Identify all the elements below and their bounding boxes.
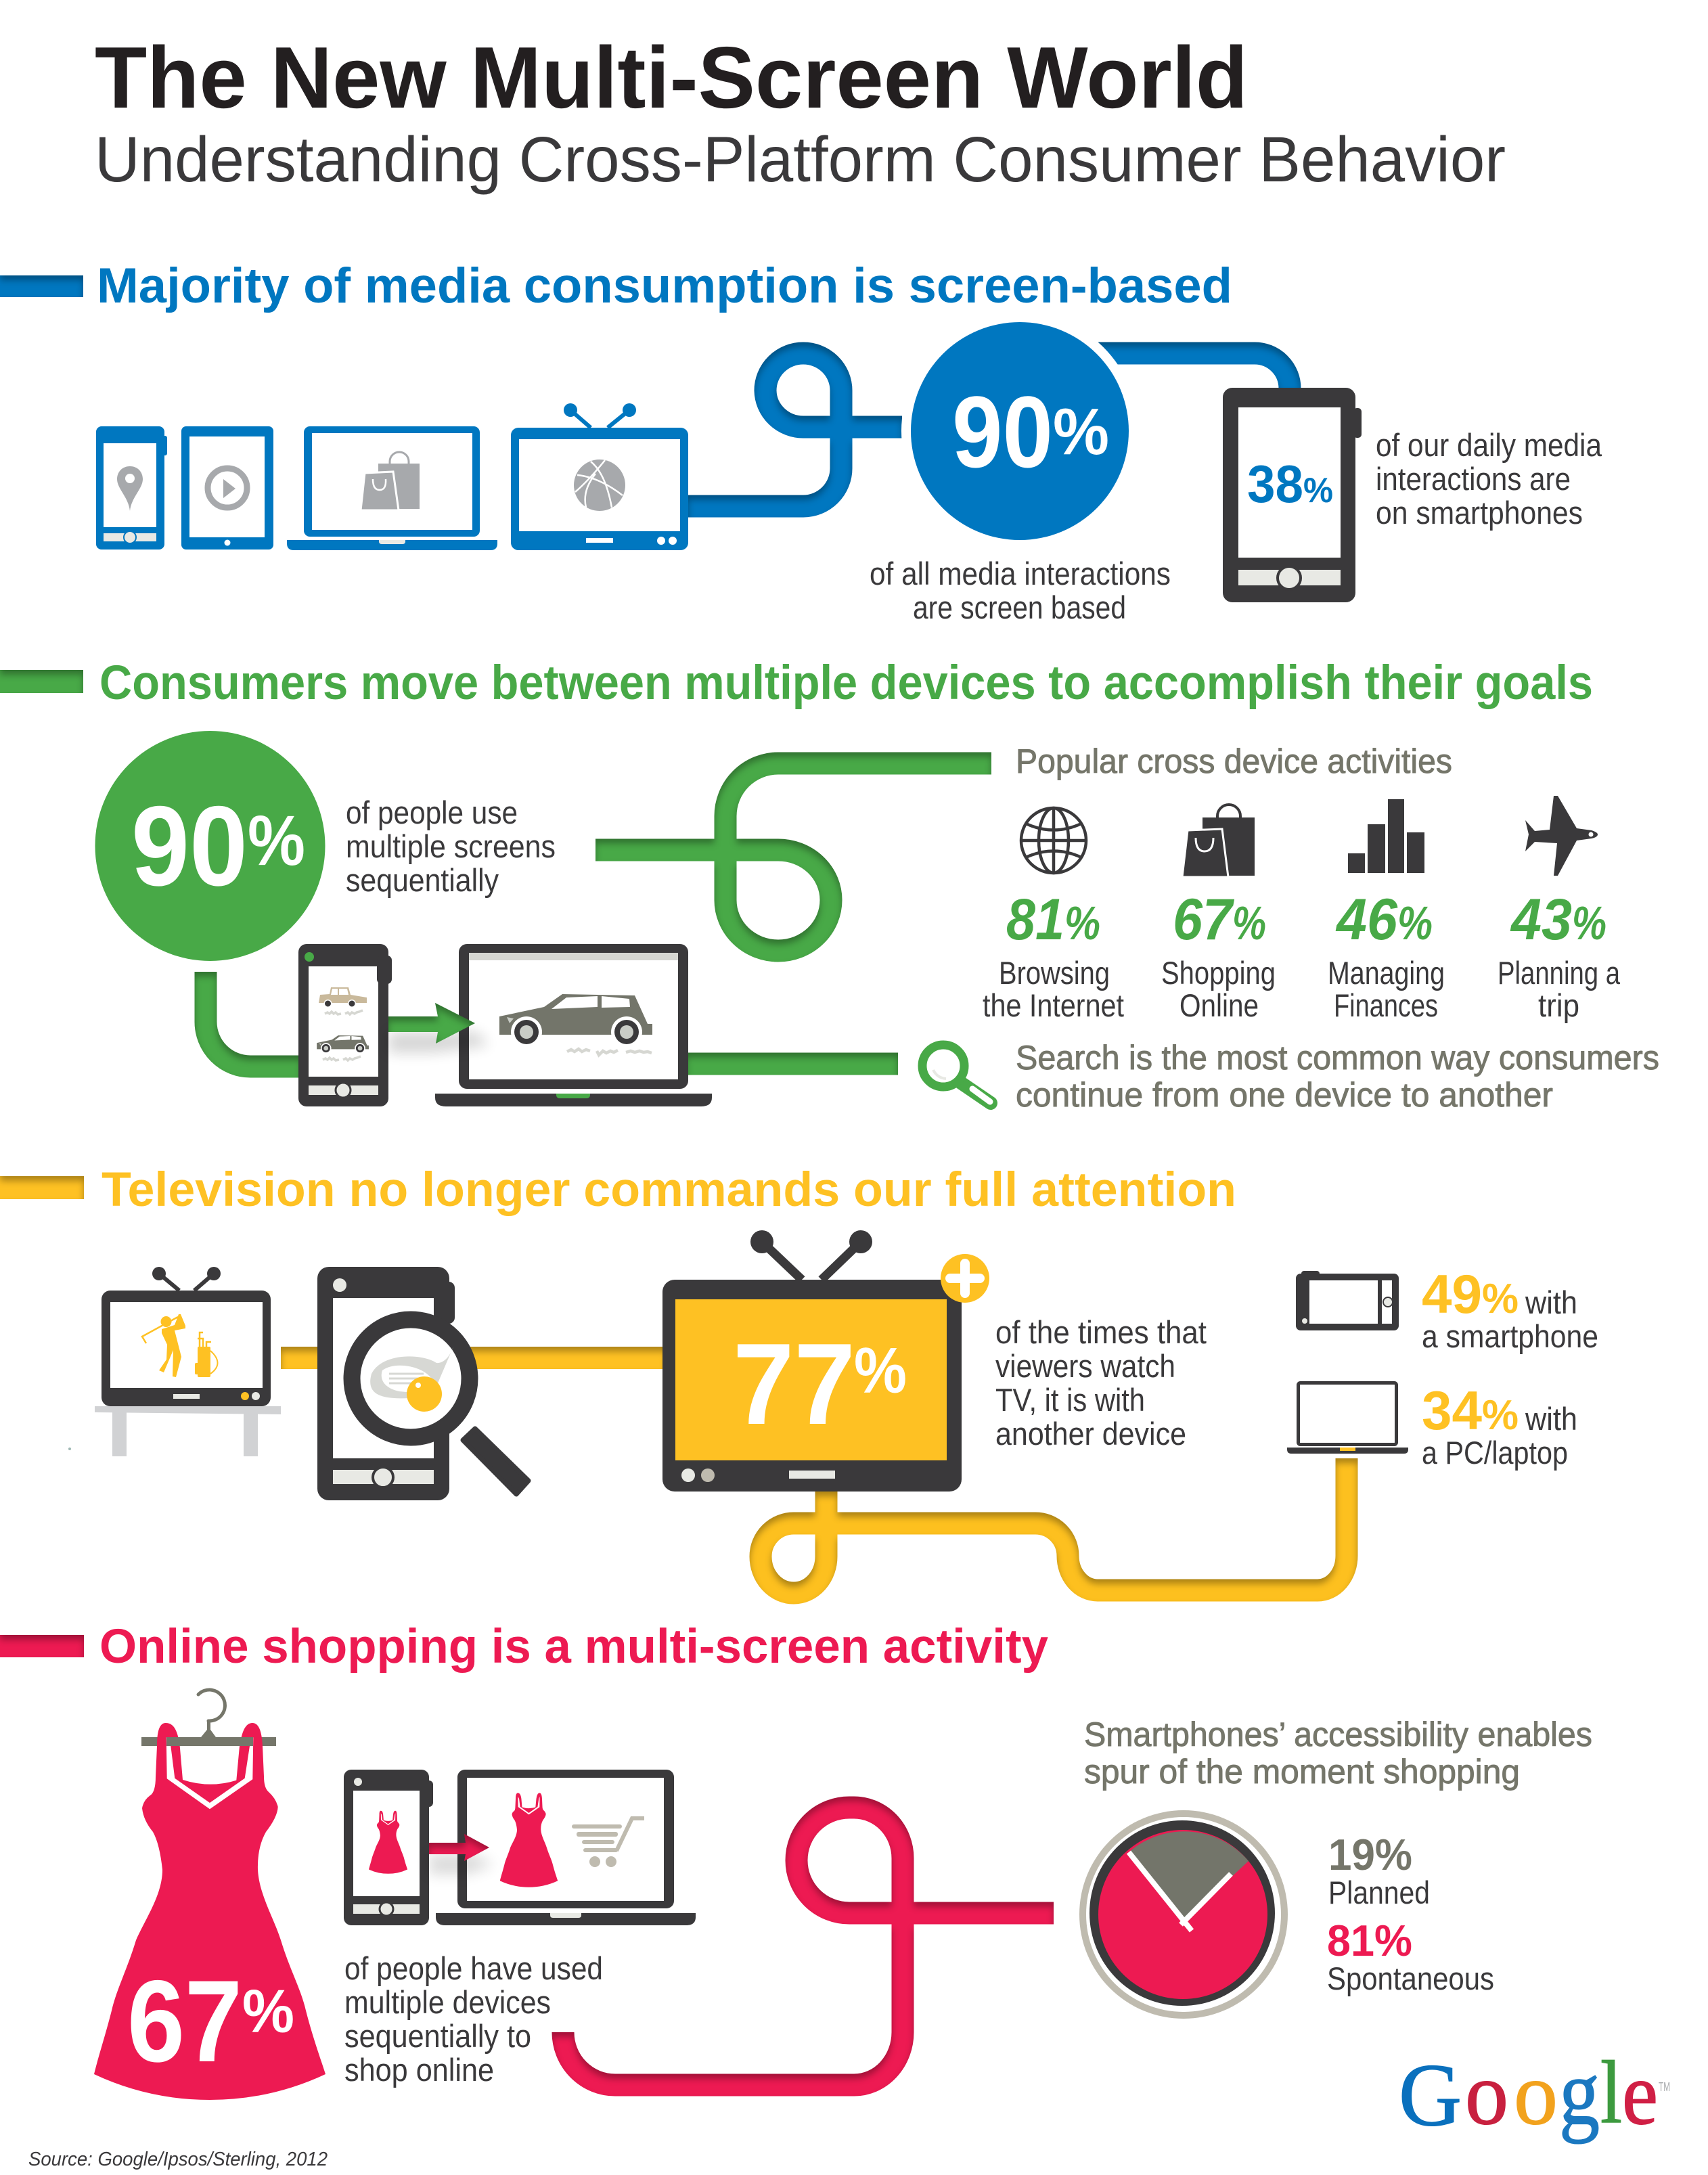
callout: search text: Search is the most common way consumers	[1016, 1039, 1659, 1077]
icon: laptop with shopping bags	[287, 426, 497, 550]
stat: finances 46 percent: Managing	[1328, 955, 1445, 991]
cable: yellow connecting TVs	[281, 1347, 667, 1369]
icon: phone with magnifier and golf club	[317, 1267, 529, 1500]
source note: Source: Google/Ipsos/Sterling, 2012	[28, 2149, 328, 2170]
stat circle: 90 percent	[901, 313, 1138, 550]
caption: sequential screens	[346, 794, 556, 898]
caption: 38 percent: on smartphones	[1376, 495, 1583, 531]
caption: 77 percent	[995, 1314, 1207, 1452]
stat: shopping 67 percent: 67	[1173, 887, 1235, 952]
stat: finances 46 percent: %	[1397, 897, 1433, 949]
stat: 19 percent planned: 19%	[1328, 1830, 1412, 1879]
cable: circle to phone	[206, 972, 301, 1067]
caption: 67 percent: of people have used	[344, 1950, 603, 1986]
stat: browsing 81 percent: %	[1064, 897, 1100, 949]
logo: Google: TM	[1659, 2080, 1670, 2094]
logo: Google: o	[1465, 2044, 1508, 2143]
stat circle: 90 percent: 90	[131, 782, 248, 910]
stat circle: 90 percent: %	[1053, 395, 1109, 468]
caption: sequential screens: of people use	[346, 794, 518, 830]
icon: globe	[1021, 808, 1086, 873]
subheading: popular activities: Popular cross device activities	[1016, 742, 1452, 780]
stat: browsing 81 percent: Browsing	[999, 955, 1110, 991]
stat: 34 percent with laptop: 34	[1422, 1381, 1482, 1441]
subheading: spur of the moment: spur of the moment shopping	[1084, 1753, 1520, 1791]
stat: 81 percent spontaneous: 81%	[1327, 1916, 1412, 1965]
icon: large TV with 77 percent: %	[854, 1335, 907, 1407]
caption: 38 percent	[1376, 427, 1602, 531]
caption: 67 percent	[344, 1950, 603, 2088]
logo: Google	[1399, 2040, 1670, 2145]
speck	[68, 1448, 71, 1450]
logo: Google: g	[1559, 2040, 1600, 2144]
cable: red loop to clock	[563, 1808, 1054, 2085]
caption: 90 percent: of all media interactions	[870, 556, 1171, 591]
icon: phone with car listings	[298, 944, 392, 1106]
stat: finances 46 percent: Finances	[1334, 987, 1438, 1023]
icon: plus badge	[941, 1254, 989, 1303]
stat: trip 43 percent	[1498, 887, 1621, 1023]
stat: 19 percent planned: Planned	[1328, 1875, 1430, 1910]
stat: 49 percent with smartphone: with	[1525, 1284, 1577, 1320]
stat circle: 90 percent: 90	[952, 375, 1053, 489]
stat: 81 percent spontaneous: Spontaneous	[1327, 1960, 1494, 1996]
subheading: spur of the moment	[1084, 1716, 1592, 1791]
arrow: phone to laptop	[388, 1003, 489, 1053]
icon: bar chart	[1348, 799, 1424, 873]
cable: yellow loop to laptop	[761, 1458, 1347, 1593]
stat: trip 43 percent: Planning a	[1498, 955, 1621, 991]
callout: search text	[1016, 1039, 1659, 1114]
stat: 49 percent with smartphone	[1422, 1264, 1598, 1354]
heading: online shopping: Online shopping is a multi-screen activity	[99, 1620, 1049, 1674]
stat: 34 percent with laptop: a PC/laptop	[1422, 1435, 1568, 1471]
stat: shopping 67 percent	[1161, 887, 1276, 1023]
icon: dress on hanger with 67 percent: 67	[127, 1956, 242, 2086]
arrow: phone to laptop	[429, 1834, 494, 1875]
caption: 67 percent: sequentially to	[344, 2018, 531, 2054]
icon: large smartphone with 38 percent	[1223, 388, 1362, 602]
section bar: red	[0, 1635, 84, 1657]
section bar: yellow	[0, 1176, 84, 1199]
icon: smartphone with map pin	[96, 426, 167, 550]
icon: laptop with car	[435, 944, 712, 1106]
caption: sequential screens: multiple screens	[346, 828, 556, 864]
subheading: spur of the moment: Smartphones’ accessibility enables	[1084, 1716, 1592, 1753]
title: The New Multi-Screen World	[95, 29, 1248, 127]
stat: 34 percent with laptop: %	[1482, 1392, 1519, 1439]
stat: 81 percent spontaneous	[1327, 1916, 1494, 1996]
stat circle: 90 percent: %	[248, 801, 305, 880]
heading: media consumption: Majority of media consumption is screen-based	[97, 259, 1232, 313]
stat: 34 percent with laptop	[1422, 1381, 1577, 1471]
stat: trip 43 percent: 43	[1510, 887, 1572, 952]
stat: browsing 81 percent: 81	[1006, 887, 1064, 952]
stat: trip 43 percent: trip	[1538, 987, 1579, 1023]
caption: 77 percent: TV, it is with	[995, 1382, 1145, 1418]
caption: 90 percent: are screen based	[913, 589, 1126, 625]
icon: dress on hanger with 67 percent	[94, 1690, 325, 2100]
caption: 67 percent: multiple devices	[344, 1984, 551, 2020]
heading: multiple devices: Consumers move between multiple devices to accomplish their goals	[99, 656, 1593, 710]
callout: search text: continue from one device to another	[1016, 1076, 1553, 1114]
cable: loop to popular activities	[595, 763, 991, 951]
stat: 19 percent planned	[1328, 1830, 1430, 1910]
stat: browsing 81 percent	[983, 887, 1124, 1023]
icon: TV with basketball	[511, 403, 688, 550]
stat: shopping 67 percent: %	[1232, 897, 1266, 949]
caption: 38 percent: of our daily media	[1376, 427, 1602, 463]
icon: phone with dress	[344, 1770, 433, 1925]
stat: 49 percent with smartphone: 49	[1422, 1264, 1482, 1325]
icon: large smartphone with 38 percent: %	[1303, 471, 1333, 510]
stat: 34 percent with laptop: with	[1525, 1401, 1577, 1437]
icon: green magnifier	[922, 1045, 991, 1103]
section bar: green	[0, 670, 83, 693]
cable: circle to phone	[1083, 353, 1290, 388]
caption: 38 percent: interactions are	[1376, 461, 1571, 497]
panel: screen-based media	[96, 313, 1602, 625]
icon: laptop with dress and cart	[436, 1770, 696, 1925]
heading: television: Television no longer commands our full attention	[102, 1163, 1236, 1217]
subtitle: Understanding Cross-Platform Consumer Behavior	[95, 124, 1506, 196]
icon: smartphone landscape	[1296, 1271, 1399, 1330]
caption: sequential screens: sequentially	[346, 862, 499, 898]
caption: 90 percent	[870, 556, 1171, 625]
icon: airplane	[1525, 796, 1598, 876]
icon: small TV on table	[95, 1267, 281, 1456]
logo: Google: o	[1514, 2044, 1558, 2143]
caption: 77 percent: of the times that	[995, 1314, 1207, 1350]
icon: large TV with 77 percent	[662, 1230, 962, 1492]
icon: large TV with 77 percent: 77	[733, 1320, 855, 1449]
stat: browsing 81 percent: the Internet	[983, 987, 1124, 1023]
panel: television	[68, 1230, 1598, 1593]
caption: 67 percent: shop online	[344, 2052, 494, 2088]
panel: cross device behaviour	[95, 731, 1659, 1114]
stat: 49 percent with smartphone: a smartphone	[1422, 1318, 1598, 1354]
cable: laptop to search	[687, 1053, 898, 1075]
icon: small laptop	[1287, 1383, 1408, 1454]
icon: tablet with play button	[181, 426, 273, 550]
stat: finances 46 percent: 46	[1335, 887, 1398, 952]
stat: finances 46 percent	[1328, 887, 1445, 1023]
icon: shopping bags	[1182, 805, 1255, 877]
caption: 77 percent: another device	[995, 1416, 1186, 1452]
cable: TV to 90% circle	[688, 353, 902, 506]
logo: Google: e	[1622, 2044, 1658, 2143]
icon: large smartphone with 38 percent: 38	[1247, 454, 1303, 514]
stat circle: 90 percent	[95, 731, 325, 961]
logo: Google: l	[1600, 2042, 1622, 2142]
stat: 49 percent with smartphone: %	[1482, 1276, 1519, 1322]
icon: dress on hanger with 67 percent: %	[242, 1978, 294, 2046]
stat: shopping 67 percent: Online	[1179, 987, 1259, 1023]
caption: 77 percent: viewers watch	[995, 1348, 1175, 1384]
logo: Google: G	[1399, 2045, 1462, 2145]
stat: shopping 67 percent: Shopping	[1161, 955, 1276, 991]
stat: trip 43 percent: %	[1572, 897, 1606, 949]
chart: clock pie 19 and 81 percent	[1079, 1810, 1288, 2019]
section bar: blue	[0, 275, 83, 297]
panel: online shopping	[94, 1690, 1592, 2100]
